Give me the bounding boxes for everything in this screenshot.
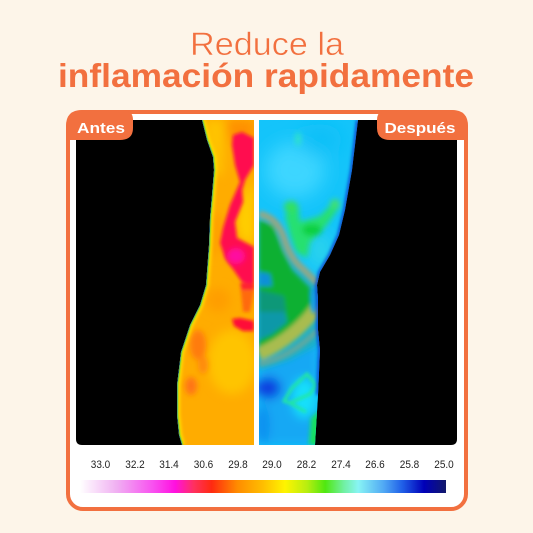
thermal image: after, cooled leg <box>254 120 360 445</box>
knee green zone <box>259 220 312 352</box>
leg edge shade <box>317 120 358 395</box>
panel: thermal comparison card <box>66 110 468 509</box>
grey band along knee <box>259 214 318 284</box>
label: Después <box>377 110 468 140</box>
label: Después: Después <box>384 120 456 137</box>
temperature scale labels: 33.0 <box>91 459 110 471</box>
leg edge glow <box>177 120 214 445</box>
temperature scale labels: 29.8 <box>228 459 248 471</box>
title: Reduce la <box>190 26 344 62</box>
temperature scale labels: 31.4 <box>159 459 179 471</box>
label: Antes: Antes <box>77 120 125 137</box>
temperature scale labels: 28.2 <box>297 459 316 471</box>
temperature colour bar <box>80 480 446 493</box>
temperature scale labels: 25.8 <box>400 459 419 471</box>
label: Antes <box>66 110 133 140</box>
thermal image frame <box>76 120 457 445</box>
temperature scale labels: 32.2 <box>125 459 145 471</box>
temperature scale labels: 26.6 <box>365 459 385 471</box>
temperature scale labels: 29.0 <box>262 459 282 471</box>
temperature scale labels: 30.6 <box>194 459 213 471</box>
yellow-grey band under knee <box>259 306 318 354</box>
title: inflamación rapidamente <box>58 57 474 94</box>
temperature scale labels: 25.0 <box>434 459 454 471</box>
thermal image: before, inflamed leg <box>177 120 254 445</box>
temperature scale labels <box>91 459 454 471</box>
title <box>58 26 474 94</box>
green ring on shin <box>284 374 316 412</box>
divider <box>254 120 259 445</box>
temperature scale labels: 27.4 <box>331 459 351 471</box>
